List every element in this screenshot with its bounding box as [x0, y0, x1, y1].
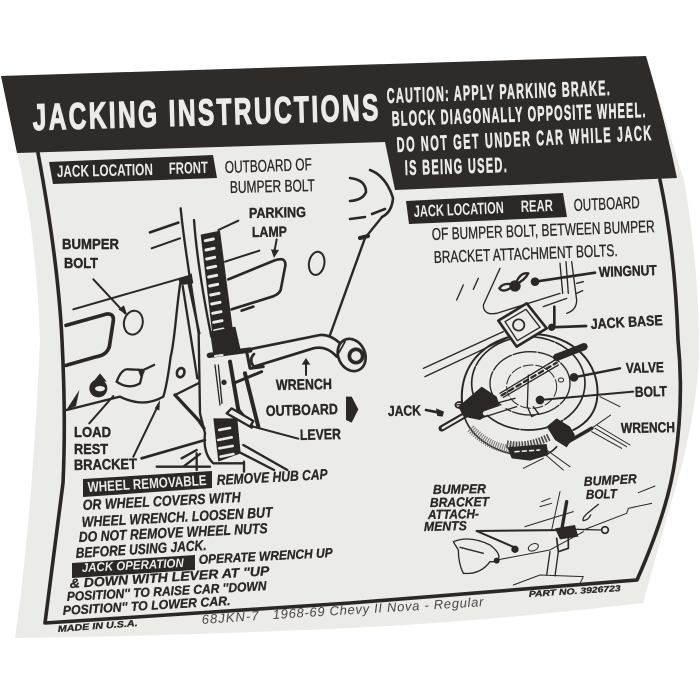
wheel removable block: WHEEL REMOVABLE — [87, 473, 207, 496]
rear labels: MENTS — [424, 518, 467, 534]
jack arrow — [426, 408, 444, 417]
rear labels: WRENCH — [621, 420, 675, 437]
rear jack location heading: JACK LOCATION — [413, 199, 504, 221]
bracket — [67, 281, 199, 410]
bumper bracket diagram — [453, 486, 655, 585]
outboard arrow — [346, 397, 358, 423]
footer text: 68JKN-7 — [201, 608, 260, 627]
rear labels: BOLT — [586, 486, 618, 502]
jack operation block: OPERATE WRENCH UP — [198, 545, 333, 567]
front labels: BOLT — [64, 255, 98, 272]
rear labels: JACK — [388, 403, 422, 420]
front labels: LAMP — [252, 224, 287, 241]
footer text: MADE IN U.S.A. — [57, 618, 138, 634]
parking lamp outline — [228, 259, 285, 311]
wheel removable block: OR WHEEL COVERS WITH — [82, 490, 241, 514]
wheel removable block: WHEEL WRENCH. LOOSEN BUT — [81, 505, 274, 531]
caution text: DO NOT GET UNDER CAR WHILE JACK — [396, 121, 652, 157]
bracket top corner — [178, 273, 193, 285]
footer text — [57, 583, 621, 634]
title: JACKING INSTRUCTIONS — [32, 87, 379, 138]
front labels: BRACKET — [74, 456, 137, 474]
rear labels: VALVE — [626, 360, 664, 377]
caution text: IS BEING USED. — [404, 153, 507, 180]
rear jack location heading — [406, 193, 655, 267]
upper hole — [307, 251, 326, 276]
rear jack diagram — [423, 262, 633, 470]
front labels: LEVER — [300, 426, 341, 444]
front labels: BUMPER — [62, 236, 119, 253]
jack body — [209, 327, 263, 427]
caution text: CAUTION: APPLY PARKING BRAKE. — [386, 76, 610, 108]
rear labels: JACK BASE — [590, 313, 663, 333]
rear wrench — [523, 397, 630, 470]
front jack location heading — [49, 155, 315, 197]
jack operation block: & DOWN WITH LEVER AT ''UP — [69, 563, 270, 591]
front jack location heading: JACK LOCATION — [57, 161, 153, 181]
jack base pointer — [548, 307, 586, 331]
car body lines — [150, 223, 178, 232]
rear labels: BUMPER — [583, 471, 638, 489]
wingnut pointer — [531, 273, 595, 286]
jack rod — [442, 347, 584, 428]
front jack location heading: OUTBOARD OF — [224, 155, 312, 177]
left lamp outline — [66, 314, 113, 365]
wheel removable block: REMOVE HUB CAP — [216, 467, 328, 489]
caution text — [386, 76, 652, 180]
bumper outline — [423, 262, 583, 377]
wheel removable block: BEFORE USING JACK. — [75, 538, 207, 562]
rear labels: BOLT — [635, 384, 667, 401]
bolt pointer — [536, 392, 633, 404]
jack operation block — [62, 545, 333, 618]
bumper bolt icon — [583, 504, 598, 521]
jack operation block: POSITION'' TO RAISE CAR ''DOWN — [66, 578, 267, 604]
rear labels: WINGNUT — [599, 263, 657, 281]
front labels: REST — [74, 441, 108, 458]
front labels: LOAD — [74, 424, 111, 441]
jack operation block: JACK OPERATION — [81, 556, 185, 575]
front jack location heading: BUMPER BOLT — [230, 176, 315, 197]
bumper bolt arrow — [93, 279, 127, 315]
lever — [227, 408, 298, 439]
wheel — [462, 334, 598, 461]
wheel removable block — [75, 467, 328, 562]
footer text: PART NO. 3926723 — [528, 583, 621, 599]
black header band — [1, 56, 677, 190]
valve pointer — [570, 368, 620, 382]
front jack diagram — [66, 208, 371, 472]
rear labels: BUMPER — [433, 481, 487, 497]
front labels: OUTBOARD — [266, 401, 338, 420]
parking lamp arrow — [271, 239, 279, 258]
wrench — [249, 334, 371, 376]
instruction frame — [38, 153, 680, 623]
rear labels — [388, 263, 675, 534]
front labels: WRENCH — [276, 376, 332, 394]
footer text: 1968-69 Chevy II Nova - Regular — [272, 594, 484, 622]
jack lower screw — [157, 418, 287, 472]
wheel removable block: DO NOT REMOVE WHEEL NUTS — [78, 521, 268, 546]
rear labels: ATTACH- — [427, 506, 479, 522]
jack screw — [181, 208, 239, 433]
rear jack location heading: REAR — [521, 197, 553, 216]
load rest knob — [67, 365, 154, 409]
jack operation block: POSITION'' TO LOWER CAR. — [62, 593, 231, 618]
callout arrows — [89, 358, 310, 458]
front labels — [62, 205, 341, 474]
caution text: BLOCK DIAGONALLY OPPOSITE WHEEL. — [391, 98, 646, 131]
rear labels: BRACKET — [430, 494, 490, 510]
rear jack location heading: BRACKET ATTACHMENT BOLTS. — [433, 241, 618, 267]
bumper curve — [350, 170, 393, 219]
front jack location heading: FRONT — [169, 159, 208, 178]
front labels: PARKING — [249, 205, 306, 222]
jack base plate — [498, 303, 547, 347]
bumper bolt hole — [122, 309, 145, 336]
rear jack location heading: OUTBOARD — [573, 193, 640, 215]
wingnut — [499, 273, 528, 292]
